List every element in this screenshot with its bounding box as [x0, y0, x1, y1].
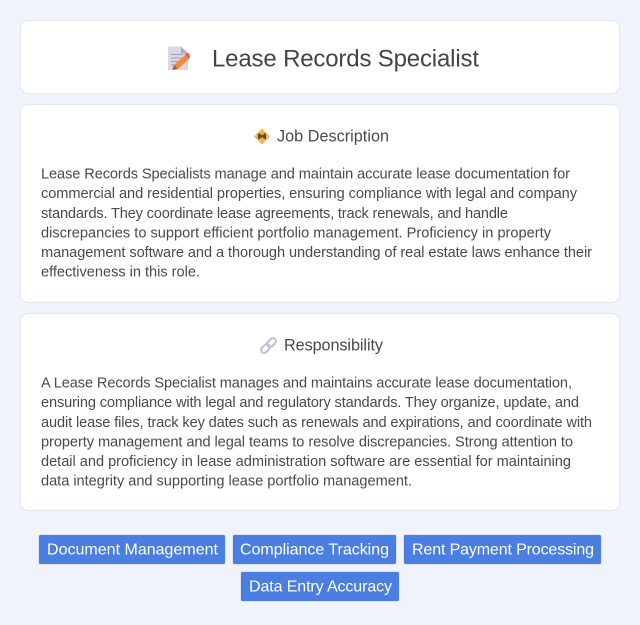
text block: job description: standards. They coordinate lease agreements, track renewals, and handle — [41, 206, 508, 222]
text block: job description: management software and a thorough understanding of real estate laws enhance their — [41, 245, 592, 261]
text block: job description: commercial and residential properties, ensuring compliance with legal and company — [41, 186, 578, 202]
heading: responsibility: Responsibility — [284, 336, 384, 354]
text block: job description: Lease Records Specialists manage and maintain accurate lease documentation for — [41, 167, 570, 183]
text block: job description: effectiveness in this role. — [41, 264, 200, 280]
heading: job description: Job Description — [277, 128, 389, 146]
icon: document with pencil — [168, 46, 190, 70]
icon: chain link — [260, 337, 277, 354]
text block: responsibility — [41, 376, 592, 489]
panel: job description — [20, 104, 620, 302]
tag: document management — [38, 534, 226, 564]
text block: responsibility: ensuring compliance with legal and regulatory standards. They organize, update, and — [41, 395, 579, 411]
tag: compliance tracking — [232, 534, 396, 564]
text block: responsibility: detail and proficiency in lease administration software are essential for maintaining — [41, 454, 571, 470]
tag: document management: Document Management — [47, 542, 219, 558]
tag: rent payment processing: Rent Payment Processing — [412, 542, 594, 558]
panel: responsibility — [20, 314, 620, 510]
text block: responsibility: audit lease files, track key dates such as renewals and expirations, and coordinate with — [41, 415, 592, 431]
tag: rent payment processing — [404, 534, 602, 564]
text block: job description: discrepancies to support efficient portfolio management. Proficiency in property — [41, 225, 552, 241]
text block: job description — [41, 167, 592, 280]
tag: compliance tracking: Compliance Tracking — [240, 542, 389, 558]
icon: diamond sign — [254, 128, 270, 144]
text block: responsibility: property management and legal teams to resolve discrepancies. Strong attention to — [41, 434, 573, 450]
tag: data entry accuracy: Data Entry Accuracy — [249, 578, 392, 596]
title: Lease Records Specialist — [212, 46, 479, 72]
tag: data entry accuracy — [240, 572, 400, 602]
text block: responsibility: A Lease Records Specialist manages and maintains accurate lease documentation, — [41, 376, 572, 392]
text block: responsibility: data integrity and supporting lease portfolio management. — [41, 473, 412, 489]
panel: title card — [20, 20, 620, 94]
